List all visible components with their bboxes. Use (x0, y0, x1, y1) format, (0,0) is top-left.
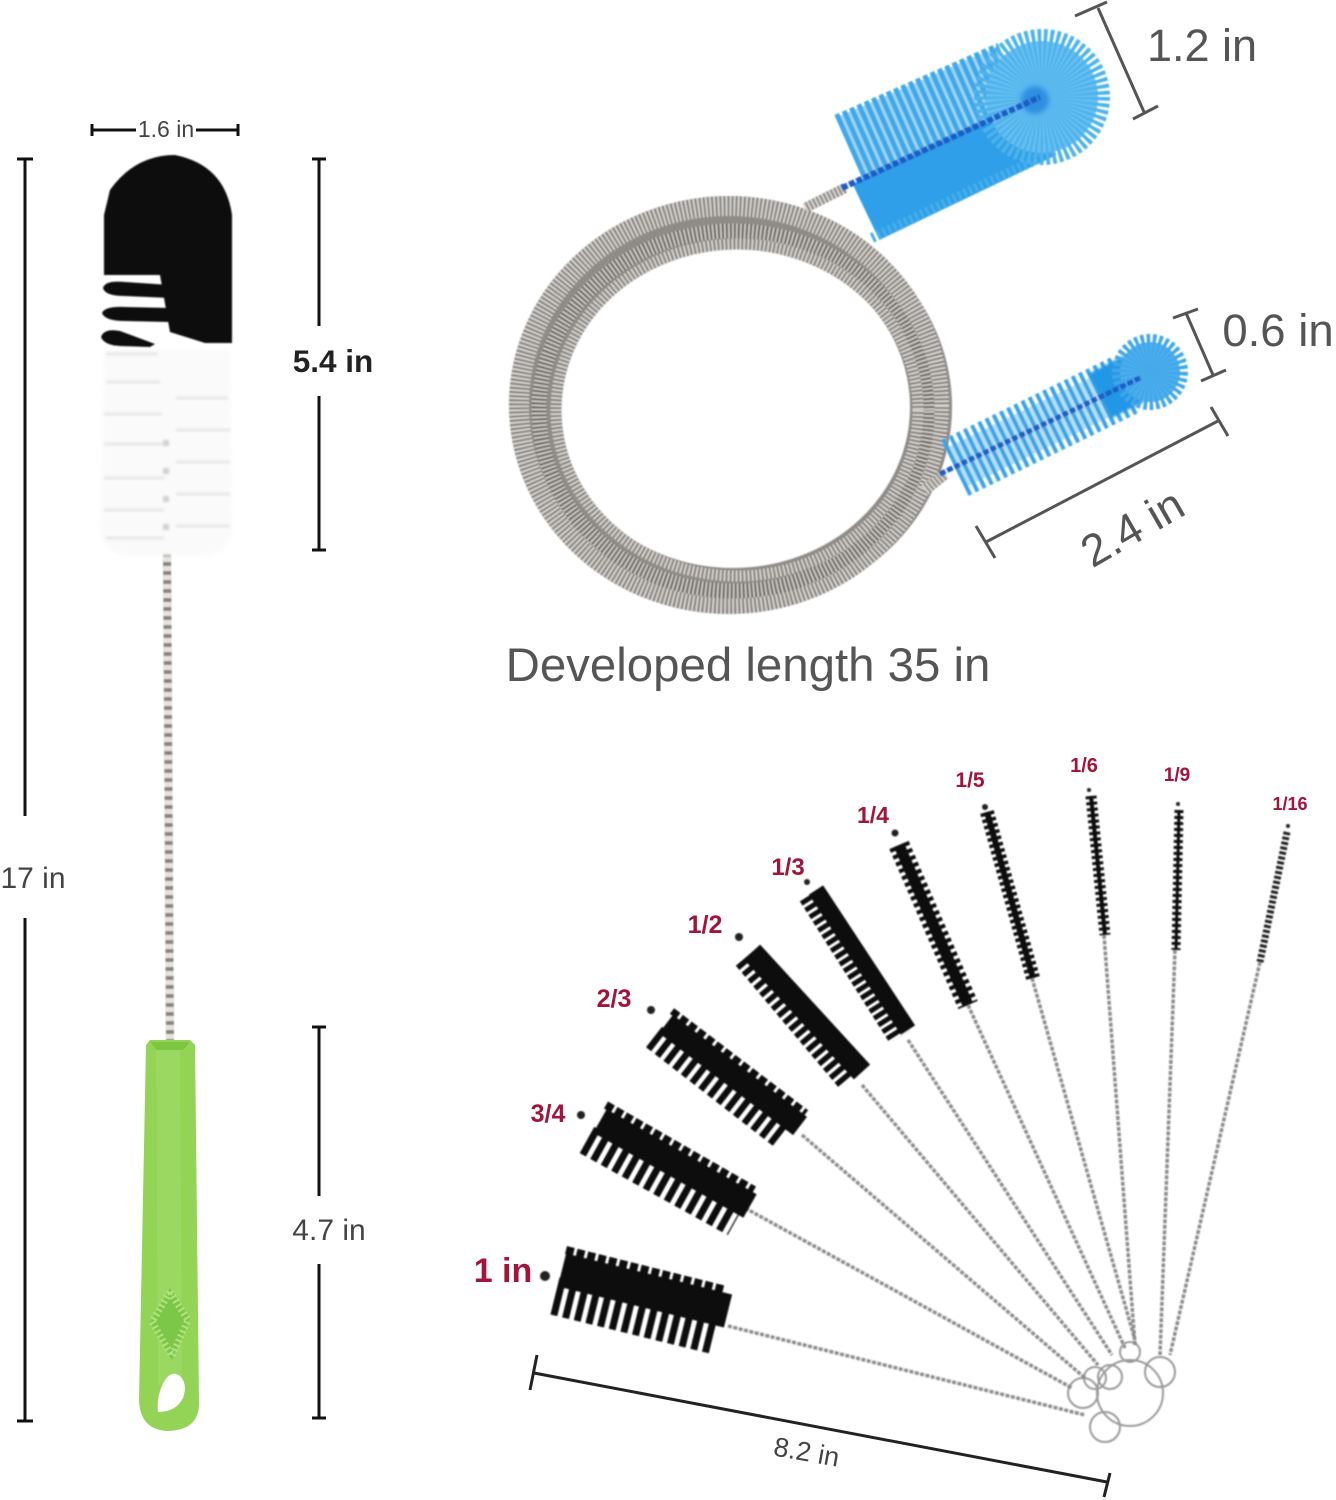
small blue brush head (940, 342, 1180, 474)
dimension: brush width 1.6 in (92, 116, 238, 142)
dimension: set length 8.2 in (530, 1355, 1110, 1497)
dimension: small head length 2.4 in (976, 407, 1228, 577)
dimension: small head 0.6 in: 0.6 in (1222, 305, 1334, 356)
size labels: 1/16 (1272, 794, 1308, 814)
green handle (139, 1040, 199, 1431)
brush 1 in (540, 1250, 728, 1336)
handle grip pattern (150, 1288, 190, 1360)
dimension: set length 8.2 in: 8.2 in (771, 1432, 842, 1473)
dimension: handle length 4.7 in: 4.7 in (292, 1214, 366, 1247)
brush 1/4 (892, 830, 968, 1005)
size labels: 1/2 (688, 911, 722, 939)
large blue brush head (842, 41, 1098, 238)
brush 1/9 (1176, 802, 1180, 950)
brush 1/6 (1087, 788, 1105, 935)
dimension: large head 1.2 in: 1.2 in (1147, 20, 1257, 71)
dimension: bristle length 5.4 in: 5.4 in (293, 343, 373, 379)
brush 3/4 (577, 1105, 754, 1222)
panel: flexible drain brush (506, 2, 1334, 692)
dimension: total length 17 in (0, 159, 66, 1421)
dimension: small head 0.6 in (1173, 305, 1334, 381)
brush 1/3 (804, 879, 908, 1037)
panel: long bottle brush (0, 116, 373, 1431)
dimension: brush width 1.6 in: 1.6 in (138, 116, 194, 142)
caption: developed length: Developed length 35 in (506, 639, 990, 692)
dimension: small head length 2.4 in: 2.4 in (1072, 478, 1193, 577)
dimension: bristle length 5.4 in (293, 159, 373, 550)
coiled spring (519, 188, 945, 604)
size labels: 1/5 (955, 769, 985, 792)
dimension: handle length 4.7 in (292, 1027, 366, 1418)
size labels: 1 in (474, 1252, 532, 1290)
white bristles (100, 350, 232, 556)
brush 1/2 (735, 933, 862, 1080)
panel: set of small tube brushes (474, 755, 1308, 1497)
dimension: total length 17 in: 17 in (0, 862, 66, 895)
size labels: 3/4 (531, 1100, 565, 1128)
black bristles (101, 155, 232, 347)
wire shafts (728, 935, 1260, 1415)
size labels: 1/4 (857, 802, 889, 828)
size labels: 1/6 (1070, 755, 1098, 777)
handle hang hole (158, 1374, 185, 1412)
size labels: 1/9 (1164, 765, 1190, 786)
brush 1/16 (1260, 824, 1290, 962)
size labels: 2/3 (597, 985, 631, 1013)
dimension: large head 1.2 in (1075, 2, 1257, 119)
size labels (474, 755, 1308, 1290)
brush 2/3 (647, 1006, 806, 1138)
size labels: 1/3 (771, 854, 805, 881)
wire rings (1068, 1342, 1175, 1442)
twisted wire shaft (167, 548, 170, 1042)
brush 1/5 (982, 804, 1033, 978)
